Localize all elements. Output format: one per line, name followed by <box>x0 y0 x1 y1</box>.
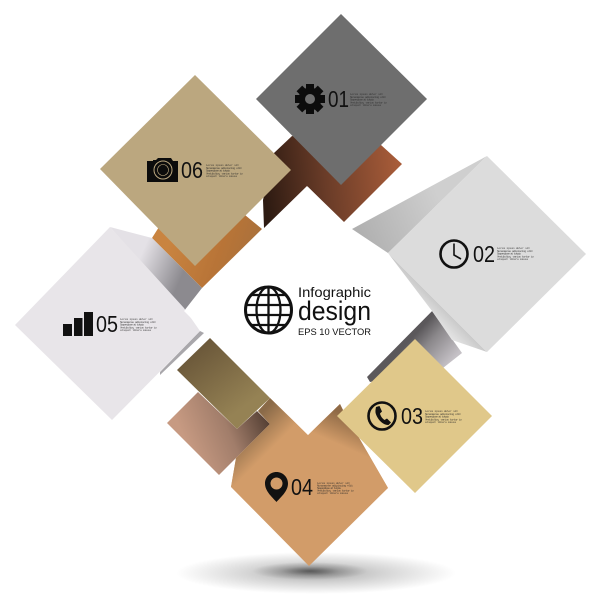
text block 06: Nonummonse adipiscing elit <box>206 166 242 170</box>
text block 04: Lorem ipsum dolor sit <box>317 481 350 485</box>
number 04: 04 <box>291 474 313 500</box>
text block 05: Lorem ipsum dolor sit <box>120 317 153 321</box>
panel: orange ribbon behind 06 <box>152 170 262 288</box>
text block 03: Lorem ipsum dolor sit <box>425 409 458 413</box>
text block 01: Lorem ipsum dolor sit <box>350 92 383 96</box>
panel: item 01 <box>256 14 427 185</box>
panel: item 02 <box>388 156 586 352</box>
panel: item 03 <box>337 339 492 493</box>
panel: item 05 <box>15 227 200 420</box>
panel: pink ribbon <box>167 392 270 475</box>
text block 02: Nonummonse adipiscing elit <box>497 249 533 253</box>
text block 05: Vestibulum, varius tortor in <box>120 325 157 329</box>
text block 06: aliquet libero massa <box>206 174 237 178</box>
text block 01 <box>350 92 387 107</box>
text block 02 <box>497 246 534 261</box>
text block 03: aliquet libero massa <box>425 420 456 424</box>
text block 06: Suspendisse at turpis <box>206 169 230 173</box>
text block 01: Nonummonse adipiscing elit <box>350 95 386 99</box>
icon: gear <box>295 84 325 114</box>
icon: clock <box>440 240 468 268</box>
text block 04: aliquet libero massa <box>317 491 348 495</box>
text block 02: aliquet libero massa <box>497 257 528 261</box>
text block 05: Suspendisse at turpis <box>120 323 144 327</box>
icon: globe <box>246 287 292 333</box>
number 01: 01 <box>328 86 349 112</box>
text block 06: Lorem ipsum dolor sit <box>206 163 239 167</box>
title: Infographic <box>298 284 371 300</box>
title: design <box>298 296 371 326</box>
text block 01: Suspendisse at turpis <box>350 98 374 102</box>
number 05: 05 <box>96 311 118 337</box>
text block 03: Nonummonse adipiscing elit <box>425 412 461 416</box>
panel: item 05 fold <box>110 227 204 375</box>
icon: phone <box>368 402 396 430</box>
icon: bars <box>63 312 93 336</box>
panel: item 06 <box>100 75 291 266</box>
panel: brown ribbon behind 01 <box>263 136 402 228</box>
panel: olive ribbon <box>177 338 270 429</box>
text block 03: Suspendisse at turpis <box>425 415 449 419</box>
icon: camera <box>147 158 178 182</box>
number 03: 03 <box>401 403 423 429</box>
text block 02: Vestibulum, varius tortor in <box>497 254 534 258</box>
panel: grey ribbon behind 03 <box>367 311 462 382</box>
number 02: 02 <box>473 241 495 267</box>
text block 04: Vestibulum, varius tortor in <box>317 488 354 492</box>
text block 01: Vestibulum, varius tortor in <box>350 100 387 104</box>
text block 04: Suspendisse at turpis <box>317 486 341 490</box>
text block 05 <box>120 317 157 332</box>
text block 01: aliquet libero massa <box>350 103 381 107</box>
text block 02: Lorem ipsum dolor sit <box>497 246 530 250</box>
title <box>298 284 371 338</box>
number 06: 06 <box>181 157 203 183</box>
title: EPS 10 VECTOR <box>298 327 371 338</box>
text block 05: aliquet libero massa <box>120 328 151 332</box>
text block 05: Nonummonse adipiscing elit <box>120 320 156 324</box>
text block 04 <box>317 481 354 495</box>
text block 03: Vestibulum, varius tortor in <box>425 417 462 421</box>
panel: item 02 fold and shade <box>352 156 487 352</box>
text block 03 <box>425 409 462 424</box>
text block 06: Vestibulum, varius tortor in <box>206 171 243 175</box>
text block 04: Nonummonse adipiscing elit <box>317 484 353 488</box>
ground shadow <box>176 552 456 594</box>
panel: central diamond <box>184 187 432 435</box>
panel: item 04 <box>231 398 388 566</box>
text block 02: Suspendisse at turpis <box>497 252 521 256</box>
text block 06 <box>206 163 243 178</box>
icon: map pin <box>265 472 288 502</box>
